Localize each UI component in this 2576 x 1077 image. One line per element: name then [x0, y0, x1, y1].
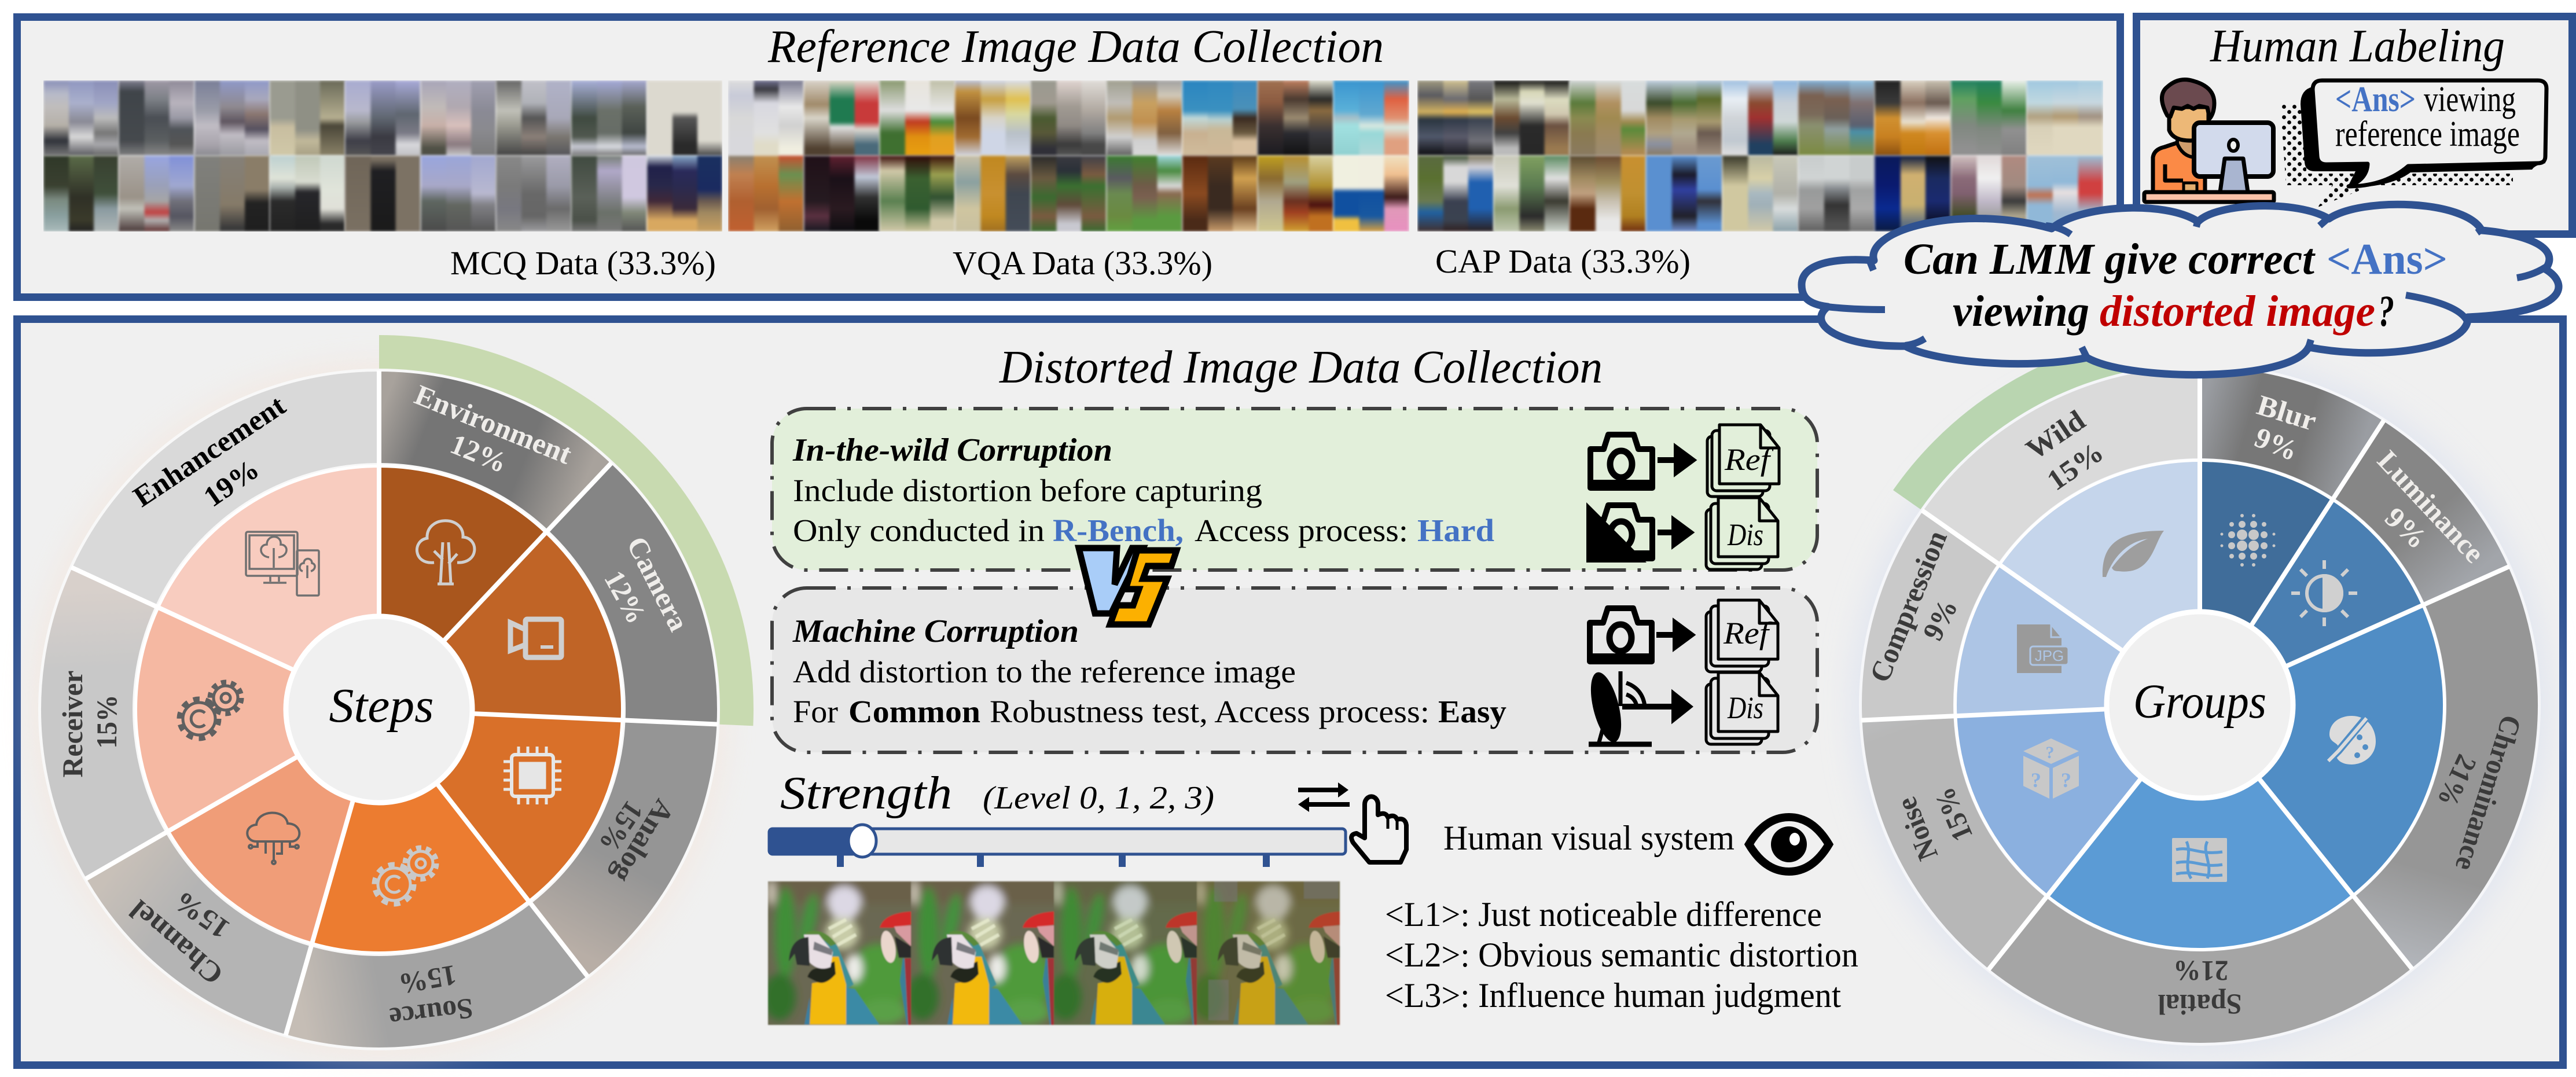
ring labels: groups [1863, 388, 2528, 1021]
icon: jpg file: JPG [2035, 647, 2064, 664]
text: human visual system: Human visual system [1443, 819, 1735, 857]
band: green arc over environment and camera [379, 352, 736, 725]
icon: dice [2023, 738, 2079, 799]
panel: machine corruption: Easy [1438, 694, 1506, 729]
icon: degraded camera to distorted: Dis [1727, 517, 1763, 552]
icon: video camera [510, 619, 561, 657]
caption: CAP data: CAP Data (33.3%) [1435, 242, 1691, 280]
ring labels: steps: 12% [446, 427, 512, 479]
panel: in-the-wild corruption: Access process: [1195, 513, 1408, 548]
text: level definitions [1385, 895, 1858, 1014]
label: groups: Groups [2133, 675, 2266, 729]
ring labels: steps: 19% [197, 453, 265, 513]
ring labels: groups: 9% [2379, 501, 2434, 555]
panel: machine corruption: For [793, 694, 838, 729]
text: level definitions: <L2>: Obvious semantic distortion [1385, 936, 1858, 974]
panel: reference image data collection [13, 13, 2124, 301]
caption: VQA data: VQA Data (33.3%) [953, 244, 1212, 282]
text: level definitions: <L3>: Influence human judgment [1385, 976, 1841, 1014]
ring labels: steps: 15% [396, 959, 459, 1001]
outer ring: distortion group shares [1789, 294, 2576, 1077]
image strip: MCQ data [43, 80, 722, 231]
cloud callout [1802, 204, 2559, 375]
ring labels: steps: Enhancement [127, 389, 291, 513]
ring labels: steps: Environment [410, 378, 576, 471]
speech bubble: answer viewing reference image: <Ans> [2335, 80, 2416, 119]
label: steps: Steps [329, 679, 434, 733]
title: reference image data collection: Reference Image Data Collection [767, 21, 1384, 72]
ring labels: groups: 21% [2174, 955, 2228, 987]
ring labels: steps: 15% [593, 795, 650, 858]
icon: camera to reference: Ref [1724, 442, 1774, 477]
cloud callout: <Ans> [2327, 235, 2448, 284]
icon: cloud circuit [247, 813, 299, 864]
icon: camera to reference machine: Ref [1723, 616, 1773, 650]
caption: MCQ data: MCQ Data (33.3%) [450, 244, 716, 282]
icon: chip [504, 747, 561, 804]
panel: in-the-wild corruption [772, 409, 1817, 570]
icon: tree [417, 521, 475, 584]
ring labels: groups: 9% [2250, 421, 2303, 467]
icon: warped grid [2172, 838, 2227, 882]
icon: dice: ? [2031, 769, 2041, 792]
label: levels: (Level 0, 1, 2, 3) [983, 780, 1214, 816]
icon: half sun [2291, 560, 2357, 626]
panel: in-the-wild corruption: Hard [1417, 513, 1494, 548]
image strip: VQA data [728, 80, 1409, 231]
slider: strength level [768, 825, 1346, 867]
ring labels: groups: 15% [1928, 783, 1979, 846]
icon: swap arrows [1298, 782, 1350, 812]
speech bubble: answer viewing reference image [2280, 80, 2546, 207]
icon: palette [2327, 716, 2376, 764]
icon: camera to reference [1590, 425, 1779, 497]
title: human labeling: Human Labeling [2210, 21, 2505, 72]
ring labels: steps: Analog [606, 794, 681, 888]
panel: in-the-wild corruption: R-Bench, [1053, 513, 1184, 548]
ring labels: steps: Receiver [56, 670, 89, 778]
icon: monitor and phone [246, 532, 319, 596]
band: green arc over wild [1908, 348, 2200, 500]
chart: steps donut [0, 296, 792, 1077]
ring labels: groups: Compression [1863, 526, 1953, 687]
panel: machine corruption: Common [848, 694, 980, 729]
glow: left donut [32, 362, 726, 1057]
ring labels: groups: 21% [2431, 750, 2483, 812]
ring labels: steps: Source [388, 992, 475, 1035]
glow: right donut [1853, 358, 2547, 1052]
panel: in-the-wild corruption: Only conducted in [793, 513, 1045, 548]
icon: satellite dish to distorted: Dis [1727, 690, 1763, 725]
icon: eye [1749, 817, 1829, 872]
ring labels: steps: 15% [90, 694, 123, 749]
ring labels: steps: 15% [168, 885, 236, 946]
icon: person at computer [2144, 80, 2274, 202]
outer ring: pipeline step shares [0, 296, 792, 1077]
ring labels: groups: 9% [1916, 594, 1964, 645]
text: level definitions: <L1>: Just noticeable difference [1385, 895, 1822, 933]
panel: human labeling [2133, 13, 2576, 238]
panel: machine corruption: Robustness test, Access process: [990, 694, 1430, 729]
panel: machine corruption: Machine Corruption [792, 613, 1079, 649]
cloud callout: distorted image [2100, 287, 2375, 336]
icon: camera to reference machine [1590, 600, 1778, 672]
ring labels: groups: Chrominance [2449, 711, 2528, 874]
speech bubble: answer viewing reference image: viewing [2424, 80, 2516, 119]
ring labels: steps: Channel [123, 894, 229, 991]
ring labels: groups: Wild [2020, 403, 2091, 466]
panel: in-the-wild corruption: In-the-wild Corruption [792, 432, 1112, 468]
icon: pointing hand [1351, 796, 1406, 862]
ring labels: steps [56, 378, 696, 1035]
icon: dice: ? [2045, 743, 2055, 762]
ring labels: groups: Luminance [2371, 444, 2491, 569]
chart: groups donut [1789, 294, 2576, 1077]
panel: distorted image data collection [13, 315, 2567, 1069]
icon: satellite dish to distorted [1585, 670, 1778, 745]
icon: blur dots [2220, 514, 2276, 567]
ring labels: steps: 12% [598, 565, 653, 629]
title: distorted image data collection: Distorted Image Data Collection [999, 342, 1603, 393]
inner ring: step segments [142, 473, 616, 946]
inner ring: group segments [1963, 468, 2437, 942]
ring labels: groups: Blur [2253, 388, 2320, 437]
ring labels: groups: Noise [1890, 793, 1944, 865]
ring labels: groups: 15% [2041, 435, 2109, 497]
icon: degraded camera to distorted [1586, 498, 1778, 569]
icon: dice: ? [2061, 769, 2071, 792]
icon: leaf [2103, 531, 2164, 577]
image: parrots at four distortion levels [762, 876, 1347, 1025]
heading: strength: Strength [780, 768, 952, 819]
icon: gears receiver [179, 682, 241, 738]
ring labels: groups: Spatial [2158, 988, 2242, 1021]
panel: machine corruption [772, 588, 1817, 752]
icon: versus badge [1079, 548, 1177, 624]
icon: gears source [374, 848, 436, 904]
icon: jpg file [2017, 624, 2068, 673]
panel: in-the-wild corruption: Include distortion before capturing [793, 473, 1262, 508]
speech bubble: answer viewing reference image: reference image [2335, 115, 2520, 154]
cloud callout: viewing [1953, 287, 2089, 336]
cloud callout: ? [2378, 287, 2394, 336]
cloud callout: Can LMM give correct [1903, 235, 2316, 284]
panel: machine corruption: Add distortion to the reference image [793, 654, 1296, 689]
image strip: CAP data [1417, 80, 2103, 231]
ring labels: steps: Camera [620, 531, 696, 636]
